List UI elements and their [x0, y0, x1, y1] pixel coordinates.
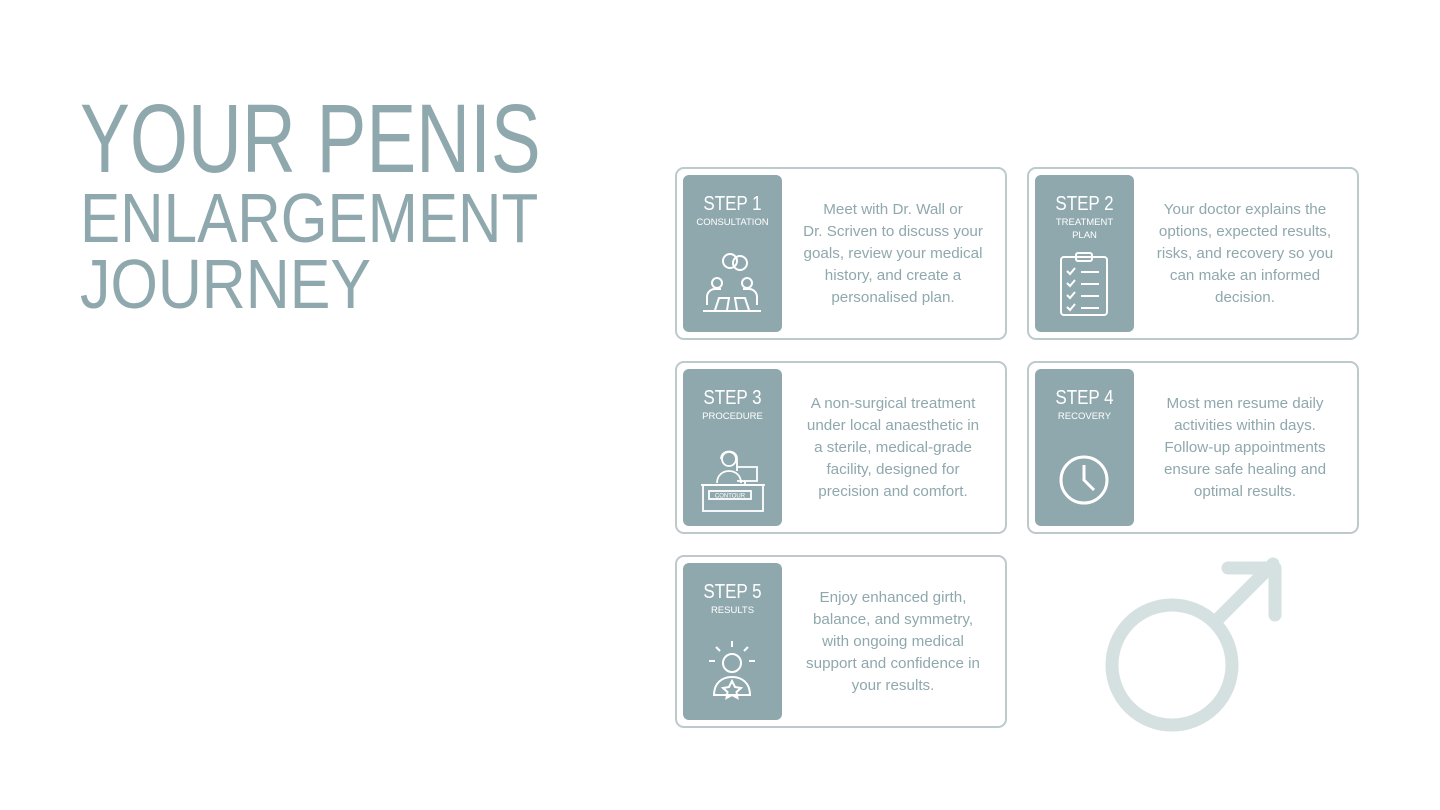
step 2 label: PLAN [1072, 230, 1097, 241]
text step 3: under local anaesthetic in [807, 417, 979, 434]
text step 3: A non-surgical treatment [811, 395, 975, 412]
card: step 5 [675, 555, 1007, 728]
icon: checklist [1060, 252, 1108, 316]
text step 4: optimal results. [1194, 483, 1296, 500]
step 2 label [1035, 175, 1134, 332]
step 1 label [683, 175, 782, 332]
card: step 3 [675, 361, 1007, 534]
text step 5: support and confidence in [806, 655, 980, 672]
step 2 label: STEP 2 [1055, 193, 1114, 215]
text step 5 [806, 589, 980, 694]
text step 1: personalised plan. [831, 289, 955, 306]
text step 2: can make an informed [1170, 267, 1320, 284]
text step 4: Most men resume daily [1166, 395, 1324, 412]
step 4 label [1035, 369, 1134, 526]
title: ENLARGEMENT [80, 179, 538, 257]
text step 4 [1164, 395, 1326, 500]
card: step 4 [1027, 361, 1359, 534]
text step 1: history, and create a [825, 267, 961, 284]
text step 5: with ongoing medical [822, 633, 964, 650]
icon: clock [1060, 456, 1108, 504]
icon: reception desk [701, 450, 765, 512]
text step 2: options, expected results, [1159, 223, 1331, 240]
icon: male symbol [1106, 558, 1282, 732]
text step 3 [807, 395, 979, 500]
title: YOUR PENIS [80, 84, 541, 193]
text step 4: activities within days. [1174, 417, 1316, 434]
text step 1 [803, 201, 983, 306]
icon: person star [709, 641, 755, 700]
icon: reception desk: CONTOUR [715, 494, 746, 500]
step 4 label: RECOVERY [1058, 411, 1111, 422]
step 2 label: TREATMENT [1056, 217, 1113, 228]
text step 4: ensure safe healing and [1164, 461, 1326, 478]
text step 2: Your doctor explains the [1164, 201, 1326, 218]
text step 5: balance, and symmetry, [813, 611, 973, 628]
text step 3: a sterile, medical-grade [814, 439, 972, 456]
step 3 label [683, 369, 782, 526]
text step 1: Meet with Dr. Wall or [823, 201, 963, 218]
step 5 label: RESULTS [711, 605, 754, 616]
title: JOURNEY [80, 245, 371, 323]
title [80, 84, 541, 323]
text step 3: facility, designed for [826, 461, 960, 478]
text step 2: decision. [1215, 289, 1275, 306]
icon: consultation [703, 253, 761, 312]
step 3 label: PROCEDURE [702, 411, 763, 422]
text step 1: Dr. Scriven to discuss your [803, 223, 983, 240]
step 1 label: CONSULTATION [696, 217, 769, 228]
card: step 1 [675, 167, 1007, 340]
text step 3: precision and comfort. [818, 483, 968, 500]
step 1 label: STEP 1 [703, 193, 762, 215]
text step 2 [1157, 201, 1333, 306]
step 5 label: STEP 5 [703, 581, 762, 603]
text step 5: your results. [852, 677, 934, 694]
text step 2: risks, and recovery so you [1157, 245, 1333, 262]
step 4 label: STEP 4 [1055, 387, 1114, 409]
text step 5: Enjoy enhanced girth, [820, 589, 966, 606]
text step 1: goals, review your medical [804, 245, 982, 262]
step 3 label: STEP 3 [703, 387, 762, 409]
card: step 2 [1027, 167, 1359, 340]
text step 4: Follow-up appointments [1164, 439, 1326, 456]
step 5 label [683, 563, 782, 720]
